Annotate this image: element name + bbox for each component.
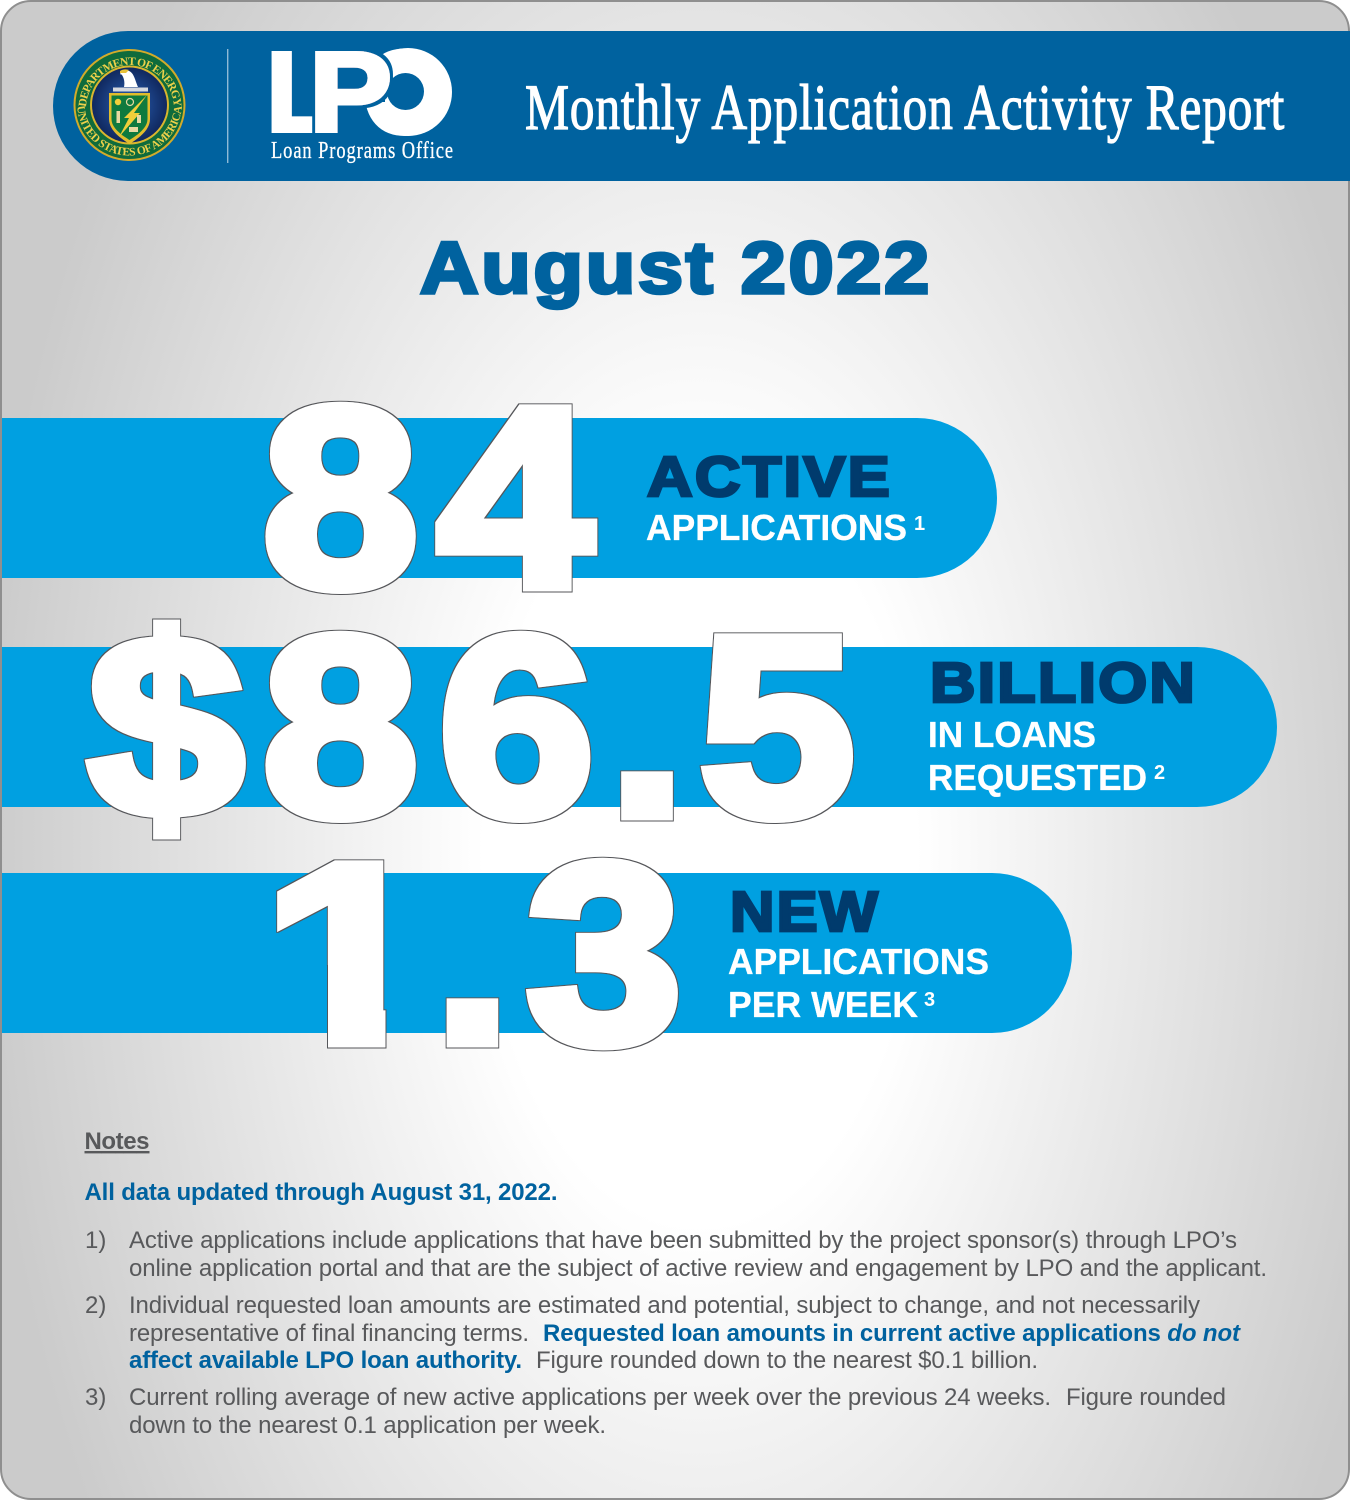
big number: 1.3 — [276, 856, 679, 1052]
note 3: 3) — [85, 1384, 106, 1411]
logo: LPO: L — [266, 29, 335, 155]
label: in loans: IN LOANS — [928, 714, 1096, 755]
big number: 1.3: 1 — [263, 810, 434, 1096]
label: applications: APPLICATIONS — [728, 941, 989, 982]
logo: LPO — [271, 48, 453, 164]
label: new: NEW — [730, 880, 880, 944]
logo: LPO: O — [362, 27, 449, 159]
note 2: Individual requested loan amounts are estimated and potential, subject to change, and not necessarily — [129, 1292, 1200, 1319]
note 2: 2) — [85, 1292, 106, 1319]
note 3: down to the nearest 0.1 application per week. — [129, 1412, 606, 1439]
note 3 — [85, 1384, 1226, 1439]
icon: Department of Energy seal: DEPARTMENT OF ENERGY — [78, 57, 182, 107]
note 3: Current rolling average of new active applications per week over the previous 24 weeks. — [129, 1384, 1051, 1411]
footnote marker 3: 3 — [924, 989, 935, 1011]
big number: 84: 84 — [263, 354, 595, 640]
logo: LPO: P — [309, 29, 392, 156]
note 2: Requested loan amounts in current active applications do not — [543, 1320, 1241, 1347]
data date: All data updated through August 31, 2022. — [84, 1179, 558, 1206]
logo subtitle: Loan Programs Office — [271, 138, 454, 164]
pill — [2, 873, 1072, 1033]
banner shape — [53, 31, 1350, 181]
note 2: Figure rounded down to the nearest $0.1 billion. — [536, 1347, 1038, 1374]
panel: active applications — [2, 354, 997, 640]
label: per week: PER WEEK — [728, 984, 918, 1025]
pill — [2, 647, 1277, 807]
label: applications: APPLICATIONS — [646, 507, 907, 548]
note 1 — [85, 1227, 1267, 1282]
note 1: 1) — [85, 1227, 106, 1254]
note 2: affect available LPO loan authority. — [129, 1347, 522, 1374]
note 1: online application portal and that are the subject of active review and engagement by LPO and the applicant. — [129, 1255, 1267, 1282]
icon: Department of Energy seal — [74, 49, 186, 161]
big number: $86.5: $86.5 — [88, 583, 855, 869]
notes — [84, 1128, 1267, 1439]
note 2: representative of final financing terms. — [129, 1320, 529, 1347]
pill — [2, 418, 997, 578]
label: requested: REQUESTED — [928, 757, 1147, 798]
panel: new applications — [2, 856, 1072, 1052]
note 1: Active applications include applications that have been submitted by the project sponsor(s) through LPO’s — [129, 1227, 1237, 1254]
big number: 1.3: .3 — [434, 810, 682, 1096]
label: active: ACTIVE — [647, 445, 892, 509]
panel: billion in loans — [2, 583, 1277, 869]
label: billion: BILLION — [930, 651, 1197, 715]
note 3: Figure rounded — [1066, 1384, 1226, 1411]
icon: Department of Energy seal: UNITED STATES OF AMERICA — [78, 106, 182, 156]
footnote marker 1: 1 — [914, 513, 925, 535]
footnote marker 2: 2 — [1154, 762, 1165, 784]
notes heading: Notes — [84, 1128, 150, 1155]
divider — [227, 49, 228, 163]
date heading: August 2022 — [420, 228, 932, 309]
header banner — [53, 27, 1350, 181]
note 2 — [85, 1292, 1241, 1374]
